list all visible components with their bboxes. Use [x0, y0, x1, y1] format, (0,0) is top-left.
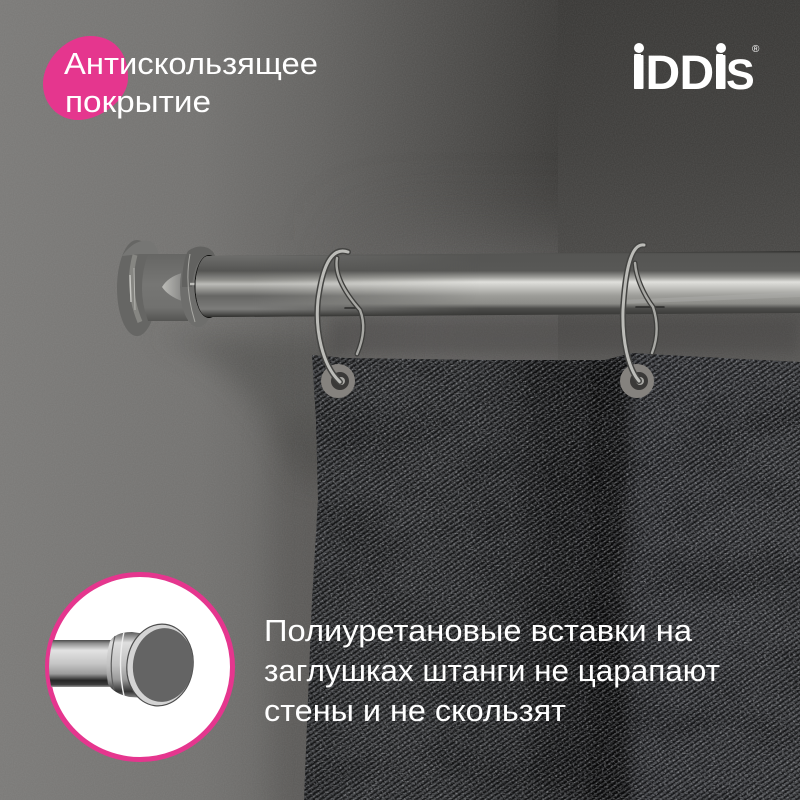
heading: anti-slip coating: Антискользящее — [64, 46, 318, 81]
curtain — [300, 345, 800, 800]
logo — [631, 43, 760, 100]
logo: ® — [752, 44, 760, 55]
grommet left — [321, 364, 355, 398]
inset cap face — [132, 628, 193, 702]
grommet right — [620, 364, 654, 398]
rod collar — [180, 247, 224, 327]
heading: anti-slip coating — [64, 46, 318, 119]
inset circle: rod end cap — [45, 574, 232, 760]
description text: заглушках штанги не царапают — [264, 653, 720, 688]
pink blob — [43, 36, 128, 120]
curtain ring right — [623, 245, 664, 381]
description text: стены и не скользят — [264, 693, 566, 728]
description text — [264, 613, 720, 728]
wall mount flange — [117, 240, 158, 336]
inset rod — [45, 640, 111, 687]
logo: S — [726, 51, 755, 99]
heading: anti-slip coating: покрытие — [65, 84, 211, 119]
mount cylinder — [142, 254, 188, 321]
curtain ring left — [317, 251, 363, 382]
logo: iDDi — [631, 47, 726, 100]
inset collar — [106, 632, 140, 698]
inset cap rim — [126, 624, 194, 706]
curtain fold shadow — [520, 360, 610, 798]
chrome rod — [196, 251, 800, 317]
description text: Полиуретановые вставки на — [264, 613, 693, 648]
